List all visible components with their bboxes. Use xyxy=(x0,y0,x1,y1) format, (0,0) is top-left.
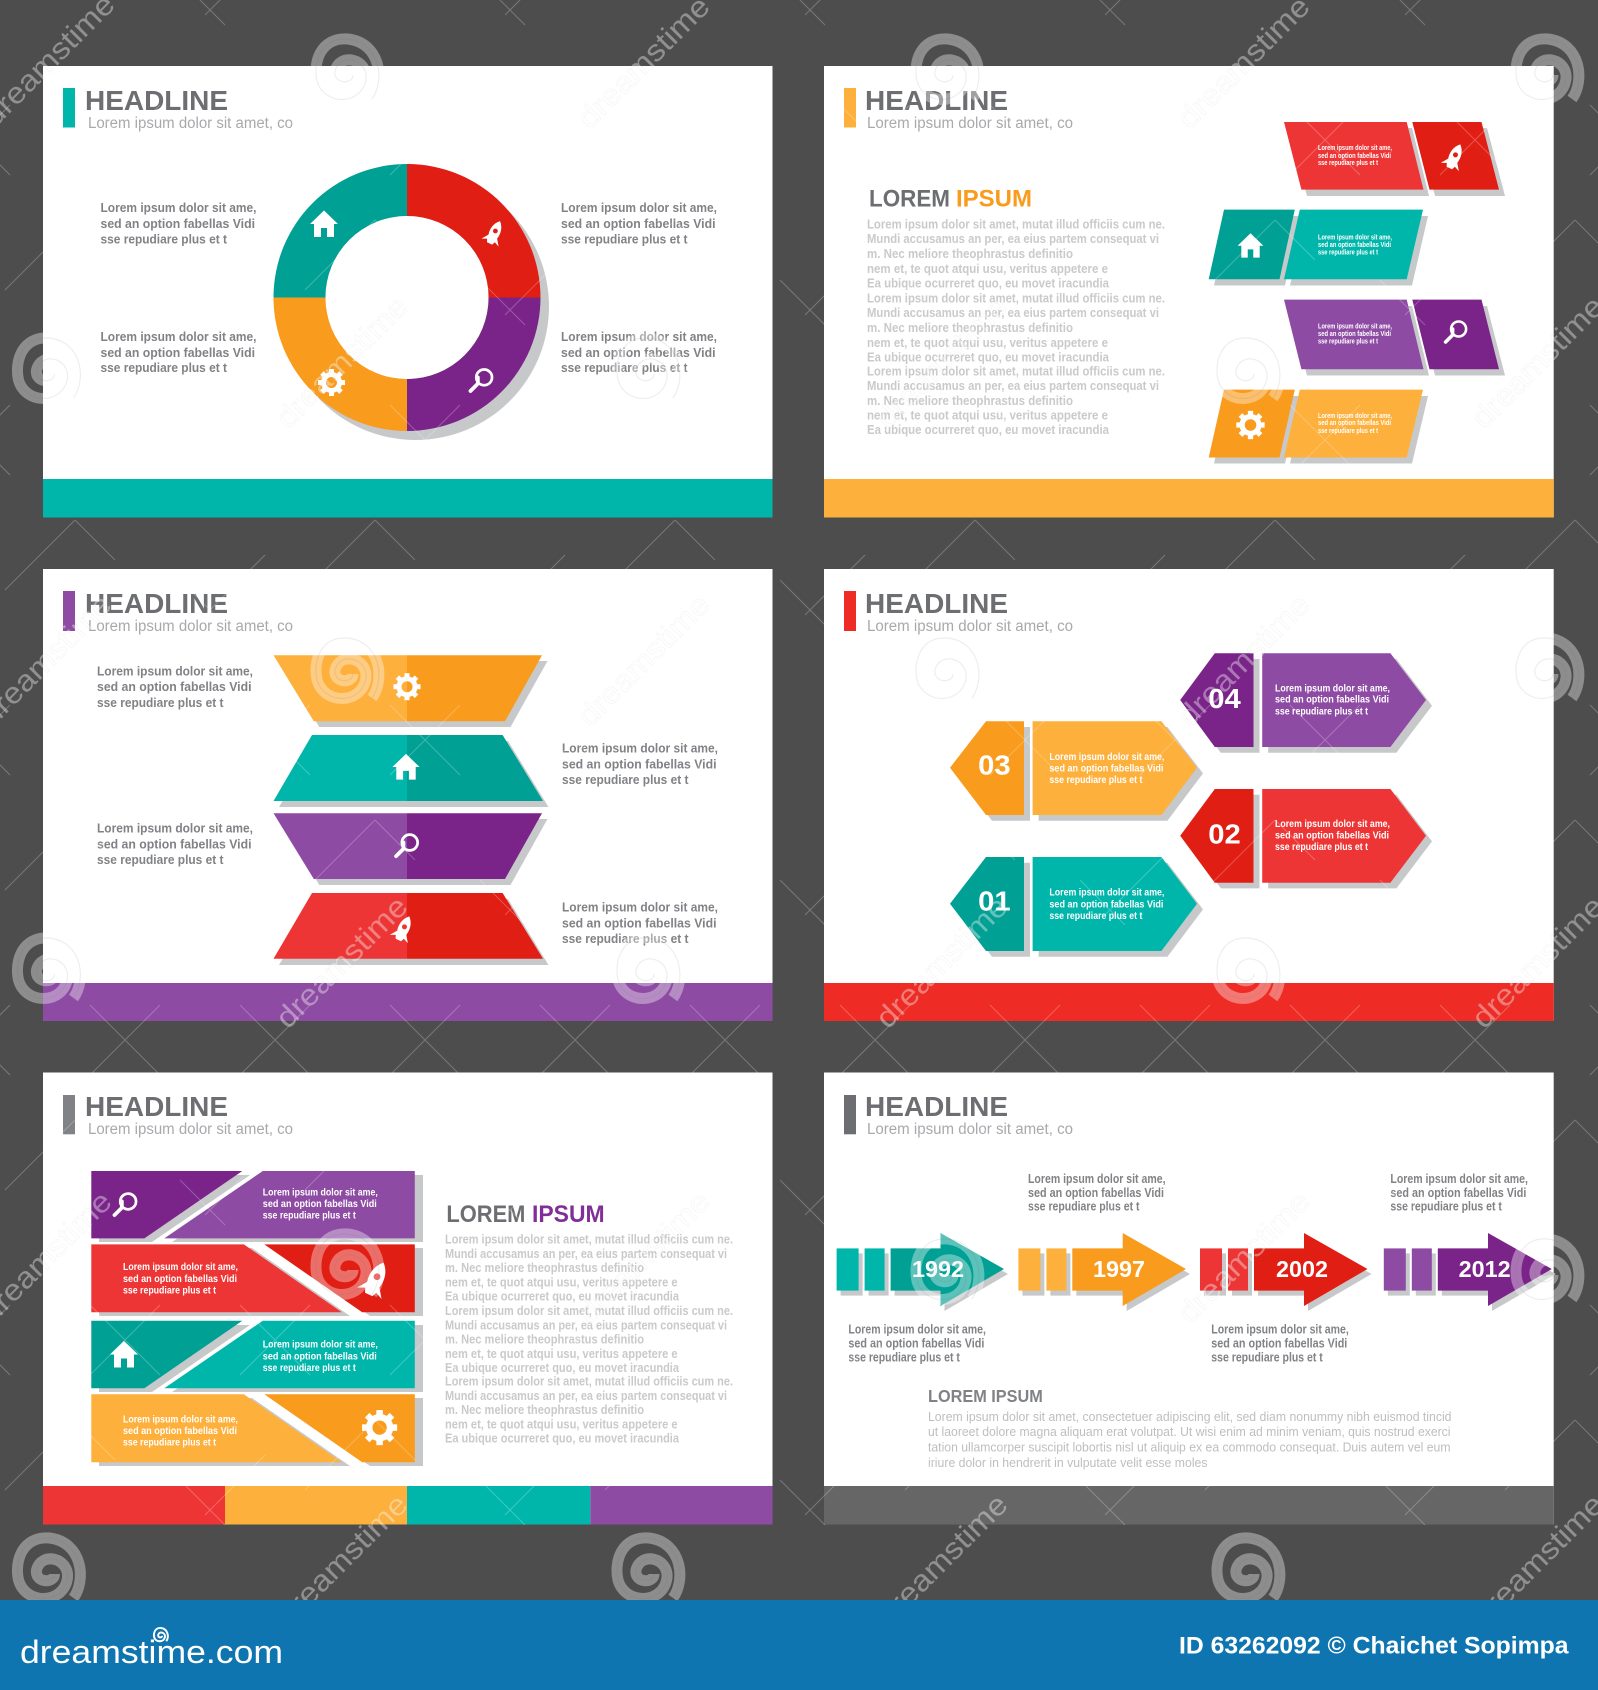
body text: Ea ubique ocurreret quo, eu movet iracundia xyxy=(867,423,1110,437)
section title xyxy=(446,1201,605,1228)
body text xyxy=(445,1233,733,1446)
watermark overlay: dreamstime xyxy=(1466,890,1598,1035)
body text: nem et, te quot atqui usu, veritus appetere e xyxy=(445,1347,678,1361)
text block: 2012: sse repudiare plus et t xyxy=(1390,1199,1502,1214)
parallelogram row: red xyxy=(1284,122,1505,196)
hexagon: 02 xyxy=(1180,789,1432,888)
watermark overlay: dreamstime xyxy=(870,1488,1015,1633)
section title: IPSUM xyxy=(532,1201,605,1228)
banner: orange: Lorem ipsum dolor sit ame, xyxy=(123,1413,238,1425)
parallelogram row: red: sed an option fabellas Vidi xyxy=(1318,153,1391,160)
parallelogram row: purple: sse repudiare plus et t xyxy=(1318,339,1379,346)
banner: purple xyxy=(91,1171,423,1242)
body text: m. Nec meliore theophrastus definitio xyxy=(445,1261,644,1275)
footer band: four colours xyxy=(43,1486,772,1524)
body text: Mundi accusamus an per, ea eius partem consequat vi xyxy=(867,306,1159,320)
text block: orange: Lorem ipsum dolor sit ame, xyxy=(97,663,253,678)
section title: LOREM xyxy=(869,186,950,212)
text block: top left: sse repudiare plus et t xyxy=(100,232,228,246)
text block: teal: sed an option fabellas Vidi xyxy=(562,756,716,771)
body text: m. Nec meliore theophrastus definitio xyxy=(867,247,1073,261)
body text: Mundi accusamus an per, ea eius partem consequat vi xyxy=(445,1389,727,1403)
text block: purple: Lorem ipsum dolor sit ame, xyxy=(97,821,253,836)
text block: bottom right: sed an option fabellas Vidi xyxy=(561,345,716,360)
text block: purple xyxy=(97,821,253,867)
body text: Lorem ipsum dolor sit amet, consectetuer adipiscing elit, sed diam nonummy nibh euismod tincid xyxy=(928,1409,1452,1424)
heading: HEADLINE xyxy=(85,588,228,619)
parallelogram row: purple: sed an option fabellas Vidi xyxy=(1318,331,1391,338)
text block: teal: sse repudiare plus et t xyxy=(562,772,689,787)
banner: red: sse repudiare plus et t xyxy=(123,1284,216,1296)
body text: Ea ubique ocurreret quo, eu movet iracundia xyxy=(445,1290,680,1304)
footer logo: dreamstime.com xyxy=(20,1634,283,1670)
arrow: 1992 xyxy=(837,1233,1008,1311)
arrow: 1992: 1992 xyxy=(912,1256,964,1282)
body text: nem et, te quot atqui usu, veritus appetere e xyxy=(867,262,1108,276)
heading: HEADLINE xyxy=(865,1091,1008,1122)
panel: timeline slide xyxy=(824,1072,1556,1524)
arrow: 1997: 1997 xyxy=(1093,1256,1145,1282)
parallelogram row: orange: sse repudiare plus et t xyxy=(1318,428,1379,435)
text block: top right xyxy=(561,200,717,246)
banner: red: Lorem ipsum dolor sit ame, xyxy=(123,1261,238,1273)
hexagon: 03: sse repudiare plus et t xyxy=(1049,774,1143,786)
watermark overlay: dreamstime xyxy=(572,0,717,135)
subheading: Lorem ipsum dolor sit amet, co xyxy=(867,115,1073,132)
hexagon: 02: sse repudiare plus et t xyxy=(1275,841,1368,853)
accent bar: orange xyxy=(844,88,856,128)
hexagon: 02: 02 xyxy=(1208,819,1241,850)
image credit: ID 63262092 © Chaichet Sopimpa xyxy=(1179,1632,1569,1660)
text block: teal xyxy=(562,741,718,787)
subheading: Lorem ipsum dolor sit amet, co xyxy=(867,1121,1073,1138)
body text: Lorem ipsum dolor sit amet, mutat illud officiis cum ne. xyxy=(445,1374,733,1388)
text block: red: sse repudiare plus et t xyxy=(562,931,689,946)
hexagon: 04: sed an option fabellas Vidi xyxy=(1275,694,1389,706)
banner: purple: sed an option fabellas Vidi xyxy=(263,1198,377,1210)
text block: 2002: sse repudiare plus et t xyxy=(1211,1349,1323,1364)
text block: top left: sed an option fabellas Vidi xyxy=(100,216,255,231)
text block: 1992: sse repudiare plus et t xyxy=(848,1349,960,1364)
hexagon: 01: sed an option fabellas Vidi xyxy=(1049,898,1163,910)
trapezoid: purple xyxy=(274,813,548,885)
text block: orange: sse repudiare plus et t xyxy=(97,695,224,710)
text block: bottom right: Lorem ipsum dolor sit ame, xyxy=(561,329,717,344)
body text: Ea ubique ocurreret quo, eu movet iracundia xyxy=(445,1361,680,1375)
hexagon: 01: Lorem ipsum dolor sit ame, xyxy=(1049,887,1164,899)
banner: orange: sse repudiare plus et t xyxy=(123,1437,216,1449)
text block: bottom right: sse repudiare plus et t xyxy=(561,360,688,375)
hexagon: 04: Lorem ipsum dolor sit ame, xyxy=(1275,682,1390,694)
text block: 2012: sed an option fabellas Vidi xyxy=(1390,1185,1526,1200)
banner: red: sed an option fabellas Vidi xyxy=(123,1273,237,1285)
parallelogram row: orange xyxy=(1209,390,1428,464)
text block: 2012: Lorem ipsum dolor sit ame, xyxy=(1390,1171,1528,1186)
text block: top left xyxy=(100,200,256,246)
body text: nem et, te quot atqui usu, veritus appetere e xyxy=(867,408,1108,422)
parallelogram row: teal: Lorem ipsum dolor sit ame, xyxy=(1318,235,1392,242)
watermark overlay: dreamstime xyxy=(870,290,1015,435)
banner: teal: sse repudiare plus et t xyxy=(263,1362,356,1374)
body text: ut laoreet dolore magna aliquam erat volutpat. Ut wisi enim ad minim veniam, quis nostrud exerci xyxy=(928,1424,1451,1439)
panel: diagonal banner slide xyxy=(43,1072,772,1524)
arrow: 2002 xyxy=(1200,1233,1372,1311)
panel: donut slide xyxy=(43,66,772,518)
arrow: 1997 xyxy=(1018,1233,1190,1311)
body text xyxy=(928,1409,1452,1470)
hexagon: 01: sse repudiare plus et t xyxy=(1049,910,1143,922)
text block: top left: Lorem ipsum dolor sit ame, xyxy=(100,200,256,215)
watermark overlay: dreamstime xyxy=(1466,290,1598,435)
body text: iriure dolor in hendrerit in vulputate velit esse moles xyxy=(928,1455,1208,1470)
arrow: 2002: 2002 xyxy=(1276,1256,1328,1282)
watermark overlay: dreamstime xyxy=(270,290,415,435)
body text: Lorem ipsum dolor sit amet, mutat illud officiis cum ne. xyxy=(867,292,1165,306)
accent bar: red xyxy=(844,591,856,631)
text block: bottom left xyxy=(100,329,256,375)
body text: Mundi accusamus an per, ea eius partem consequat vi xyxy=(445,1319,727,1333)
section title: LOREM xyxy=(446,1201,525,1228)
watermark overlay: dreamstime xyxy=(270,890,415,1035)
footer bar xyxy=(0,1600,1598,1690)
body text: nem et, te quot atqui usu, veritus appetere e xyxy=(445,1417,678,1431)
banner: orange xyxy=(91,1394,423,1466)
section title: LOREM IPSUM xyxy=(928,1386,1043,1406)
footer band: teal xyxy=(43,479,772,518)
body text: m. Nec meliore theophrastus definitio xyxy=(867,321,1073,335)
text block: bottom left: sed an option fabellas Vidi xyxy=(100,345,255,360)
text block: bottom left: Lorem ipsum dolor sit ame, xyxy=(100,329,256,344)
accent bar: dark grey xyxy=(844,1095,856,1134)
body text: m. Nec meliore theophrastus definitio xyxy=(445,1333,644,1347)
icon: gear xyxy=(318,369,345,396)
body text: Mundi accusamus an per, ea eius partem consequat vi xyxy=(867,379,1159,393)
parallelogram row: teal: sse repudiare plus et t xyxy=(1318,250,1379,257)
body text: Ea ubique ocurreret quo, eu movet iracundia xyxy=(445,1432,680,1446)
section title xyxy=(869,186,1032,212)
trapezoid: orange xyxy=(274,655,548,727)
text block: 2002: Lorem ipsum dolor sit ame, xyxy=(1211,1322,1349,1337)
body text: Lorem ipsum dolor sit amet, mutat illud officiis cum ne. xyxy=(867,218,1165,232)
text block: 1997: sed an option fabellas Vidi xyxy=(1028,1185,1164,1200)
text block: 2012 xyxy=(1390,1171,1528,1214)
hexagon: 03: sed an option fabellas Vidi xyxy=(1049,763,1163,775)
body text: tation ullamcorper suscipit lobortis nisl ut aliquip ex ea commodo consequat. Duis autem vel eum xyxy=(928,1440,1450,1455)
text block: 1992: sed an option fabellas Vidi xyxy=(848,1335,984,1350)
parallelogram row: teal xyxy=(1209,210,1428,286)
arrow: 2012 xyxy=(1384,1233,1556,1311)
subheading: Lorem ipsum dolor sit amet, co xyxy=(88,1121,293,1138)
parallelogram row: orange: sed an option fabellas Vidi xyxy=(1318,420,1391,427)
donut chart xyxy=(274,164,549,440)
hexagon: 04 xyxy=(1180,653,1432,753)
text block: bottom left: sse repudiare plus et t xyxy=(100,360,228,375)
hexagon: 01: 01 xyxy=(978,886,1011,917)
text block: red: Lorem ipsum dolor sit ame, xyxy=(562,900,718,915)
text block: 1997: sse repudiare plus et t xyxy=(1028,1199,1140,1214)
heading: HEADLINE xyxy=(85,85,228,116)
parallelogram row: red: sse repudiare plus et t xyxy=(1318,160,1379,167)
hexagon: 03 xyxy=(950,721,1203,821)
body text xyxy=(867,218,1165,437)
body text: Lorem ipsum dolor sit amet, mutat illud officiis cum ne. xyxy=(445,1233,733,1247)
panel: numbered hexagon slide xyxy=(824,569,1554,1021)
text block: top right: sed an option fabellas Vidi xyxy=(561,216,716,231)
text block: 2002: sed an option fabellas Vidi xyxy=(1211,1335,1347,1350)
body text: Lorem ipsum dolor sit amet, mutat illud officiis cum ne. xyxy=(445,1304,733,1318)
text block: 1992 xyxy=(848,1322,986,1364)
subheading: Lorem ipsum dolor sit amet, co xyxy=(867,618,1073,635)
banner: teal: Lorem ipsum dolor sit ame, xyxy=(263,1339,378,1351)
text block: red: sed an option fabellas Vidi xyxy=(562,915,716,930)
text block: purple: sse repudiare plus et t xyxy=(97,852,224,867)
trapezoid: teal xyxy=(274,735,548,807)
footer band: red xyxy=(824,983,1554,1021)
hexagon: 01 xyxy=(950,857,1203,957)
text block: red xyxy=(562,900,718,946)
text block: 1992: Lorem ipsum dolor sit ame, xyxy=(848,1322,986,1337)
body text: Ea ubique ocurreret quo, eu movet iracundia xyxy=(867,350,1110,364)
panel: trapezoid stack slide xyxy=(43,569,772,1021)
watermark overlay: dreamstime xyxy=(870,890,1015,1035)
icon: house xyxy=(310,210,338,237)
hexagon: 04: sse repudiare plus et t xyxy=(1275,705,1368,717)
heading: HEADLINE xyxy=(865,85,1008,116)
text block: bottom right xyxy=(561,329,717,375)
hexagon: 02: sed an option fabellas Vidi xyxy=(1275,830,1389,842)
watermark overlay: dreamstime xyxy=(270,1488,415,1633)
hexagon: 03: 03 xyxy=(978,750,1011,781)
banner: purple: sse repudiare plus et t xyxy=(263,1210,356,1222)
watermark overlay: dreamstime xyxy=(1172,1185,1317,1330)
arrow: 2012: 2012 xyxy=(1459,1256,1511,1282)
body text: Mundi accusamus an per, ea eius partem consequat vi xyxy=(867,232,1159,246)
footer band: grey xyxy=(824,1486,1554,1524)
footer band: purple xyxy=(43,983,772,1021)
icon: magnifier xyxy=(470,369,492,391)
text block: top right: sse repudiare plus et t xyxy=(561,232,688,246)
text block: orange xyxy=(97,663,253,710)
parallelogram row: purple: Lorem ipsum dolor sit ame, xyxy=(1318,324,1392,331)
body text: m. Nec meliore theophrastus definitio xyxy=(867,394,1073,408)
banner: teal: sed an option fabellas Vidi xyxy=(263,1350,377,1362)
text block: 2002 xyxy=(1211,1322,1349,1364)
body text: m. Nec meliore theophrastus definitio xyxy=(445,1403,644,1417)
parallelogram row: purple xyxy=(1284,300,1505,376)
hexagon: 02: Lorem ipsum dolor sit ame, xyxy=(1275,818,1390,830)
watermark overlay: dreamstime xyxy=(1172,588,1317,733)
accent bar: purple xyxy=(63,591,75,631)
panel: parallelogram slide xyxy=(824,66,1554,518)
body text: Lorem ipsum dolor sit amet, mutat illud officiis cum ne. xyxy=(867,364,1165,378)
text block: teal: Lorem ipsum dolor sit ame, xyxy=(562,741,718,756)
accent bar: grey xyxy=(63,1095,75,1134)
text block: purple: sed an option fabellas Vidi xyxy=(97,836,252,851)
hexagon: 03: Lorem ipsum dolor sit ame, xyxy=(1049,751,1164,763)
section title: IPSUM xyxy=(956,186,1032,212)
body text: nem et, te quot atqui usu, veritus appetere e xyxy=(445,1276,678,1290)
watermark overlay: dreamstime xyxy=(1466,1488,1598,1633)
heading: HEADLINE xyxy=(865,588,1008,619)
watermark overlay: dreamstime xyxy=(572,1185,717,1330)
subheading: Lorem ipsum dolor sit amet, co xyxy=(88,115,293,132)
footer band: orange xyxy=(824,479,1554,518)
banner: orange: sed an option fabellas Vidi xyxy=(123,1425,237,1437)
text block: 1997 xyxy=(1028,1171,1166,1214)
parallelogram row: teal: sed an option fabellas Vidi xyxy=(1318,242,1391,249)
accent bar: teal xyxy=(63,88,75,128)
watermark overlay: dreamstime xyxy=(1172,0,1317,135)
banner: purple: Lorem ipsum dolor sit ame, xyxy=(263,1186,378,1198)
banner: teal xyxy=(91,1321,423,1392)
banner: red xyxy=(91,1244,423,1316)
body text: nem et, te quot atqui usu, veritus appetere e xyxy=(867,336,1108,350)
watermark overlay: dreamstime xyxy=(572,588,717,733)
subheading: Lorem ipsum dolor sit amet, co xyxy=(88,618,293,635)
heading: HEADLINE xyxy=(85,1091,228,1122)
text block: orange: sed an option fabellas Vidi xyxy=(97,679,252,694)
text block: 1997: Lorem ipsum dolor sit ame, xyxy=(1028,1171,1166,1186)
icon: rocket xyxy=(481,217,509,247)
body text: Ea ubique ocurreret quo, eu movet iracundia xyxy=(867,276,1110,290)
parallelogram row: red: Lorem ipsum dolor sit ame, xyxy=(1318,145,1392,152)
text block: top right: Lorem ipsum dolor sit ame, xyxy=(561,200,717,215)
body text: Mundi accusamus an per, ea eius partem consequat vi xyxy=(445,1247,727,1261)
hexagon: 04: 04 xyxy=(1208,683,1241,714)
parallelogram row: orange: Lorem ipsum dolor sit ame, xyxy=(1318,413,1392,420)
trapezoid: red xyxy=(274,893,548,965)
